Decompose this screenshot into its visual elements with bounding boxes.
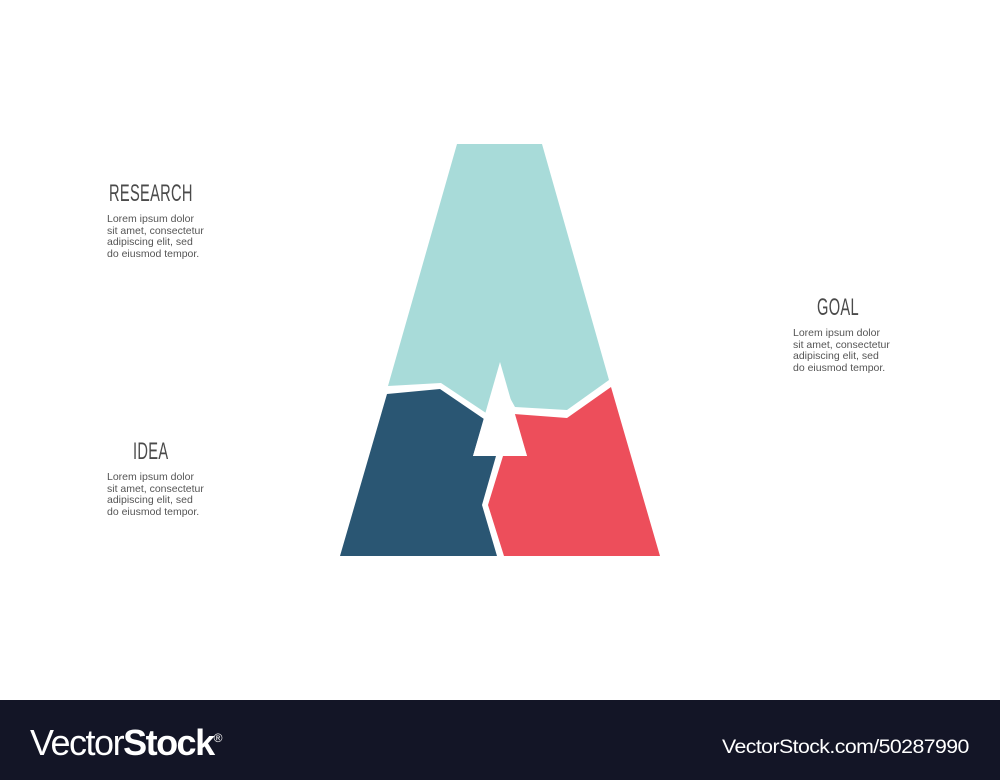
segment: goal (red): [488, 387, 660, 556]
text: idea: [107, 471, 204, 518]
text: goal: sit amet, consectetur: [793, 338, 890, 350]
text: research: sit amet, consectetur: [107, 224, 204, 236]
text: goal: Lorem ipsum dolor: [793, 327, 880, 339]
heading: goal: GOAL: [817, 294, 859, 321]
text: research: do eiusmod tempor.: [107, 248, 199, 260]
text: research: Lorem ipsum dolor: [107, 213, 194, 225]
segment: research (teal): [388, 144, 609, 413]
heading: research: RESEARCH: [109, 180, 193, 207]
segment: idea (navy): [340, 389, 497, 556]
footer: [0, 700, 1000, 780]
text: idea: Lorem ipsum dolor: [107, 471, 194, 483]
footer url: VectorStock.com/50287990: [722, 737, 969, 758]
heading: idea: IDEA: [133, 438, 168, 465]
text: goal: adipiscing elit, sed: [793, 350, 879, 362]
text: research: [107, 213, 204, 260]
text: goal: [793, 327, 890, 374]
text: research: adipiscing elit, sed: [107, 236, 193, 248]
footer logo: VectorStock®: [30, 722, 221, 763]
text: idea: adipiscing elit, sed: [107, 494, 193, 506]
text: idea: sit amet, consectetur: [107, 482, 204, 494]
text: goal: do eiusmod tempor.: [793, 362, 885, 374]
text: idea: do eiusmod tempor.: [107, 506, 199, 518]
arrow: [473, 362, 527, 456]
